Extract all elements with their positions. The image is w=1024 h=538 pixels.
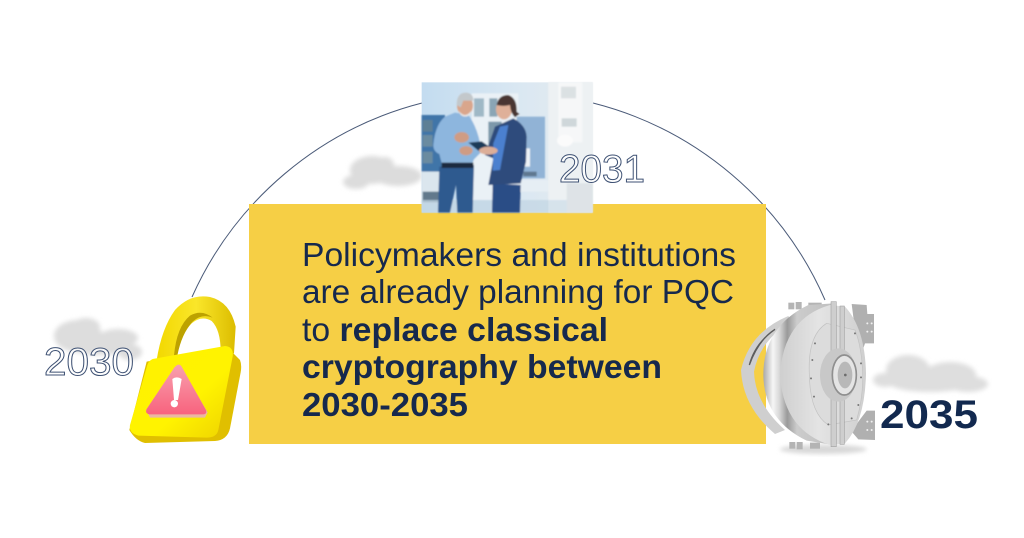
photo background: machinery <box>422 82 593 213</box>
vault rivets <box>810 332 862 425</box>
icon: yellow padlock with warning <box>129 296 241 443</box>
padlock shackle <box>157 296 236 360</box>
main statement text: Policymakers and institutions <box>302 236 736 273</box>
man <box>433 93 482 213</box>
vault handle bars <box>831 302 836 447</box>
woman <box>468 95 527 213</box>
cloud: 2031 <box>343 156 422 189</box>
vault door <box>780 305 866 445</box>
photo: man and woman with tablet <box>422 82 593 213</box>
year label: 2035: 2035 <box>880 393 978 437</box>
warning triangle <box>146 365 208 418</box>
vault drum <box>763 303 843 445</box>
main statement text: 2030-2035 <box>302 386 468 423</box>
vault bolts <box>788 302 822 449</box>
cloud: 2035 <box>873 355 988 392</box>
main statement text <box>302 236 736 423</box>
vault shadow <box>780 445 867 454</box>
photo right fade <box>548 82 593 213</box>
main statement text: are already planning for PQC <box>302 273 734 310</box>
yellow panel <box>249 204 766 444</box>
padlock body <box>129 346 241 443</box>
vault wheel <box>820 348 857 402</box>
vault open ring <box>741 316 792 434</box>
main statement text: cryptography between <box>302 348 662 385</box>
year label: 2031: 2031 <box>559 148 645 191</box>
timeline arc <box>192 103 825 300</box>
cloud: 2030 <box>54 318 142 360</box>
icon: steel vault door <box>741 302 875 454</box>
main statement text: to replace classical <box>302 311 608 348</box>
year label: 2030: 2030 <box>44 341 134 384</box>
vault hinge plates <box>852 304 875 440</box>
